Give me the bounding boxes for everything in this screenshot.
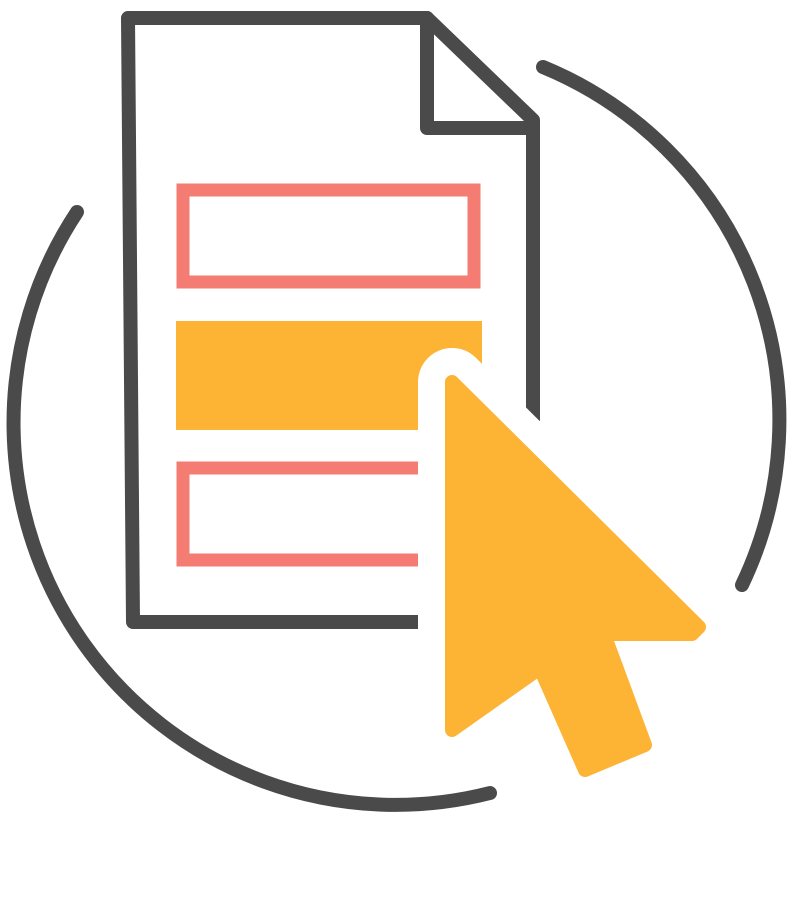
form field: filled highlighted xyxy=(176,321,482,430)
icon: document outline xyxy=(128,18,533,622)
icon: mouse cursor xyxy=(452,382,699,770)
form field: bottom outlined xyxy=(183,468,474,560)
form field: top outlined xyxy=(183,190,474,282)
icon: circular refresh arcs xyxy=(14,67,779,805)
